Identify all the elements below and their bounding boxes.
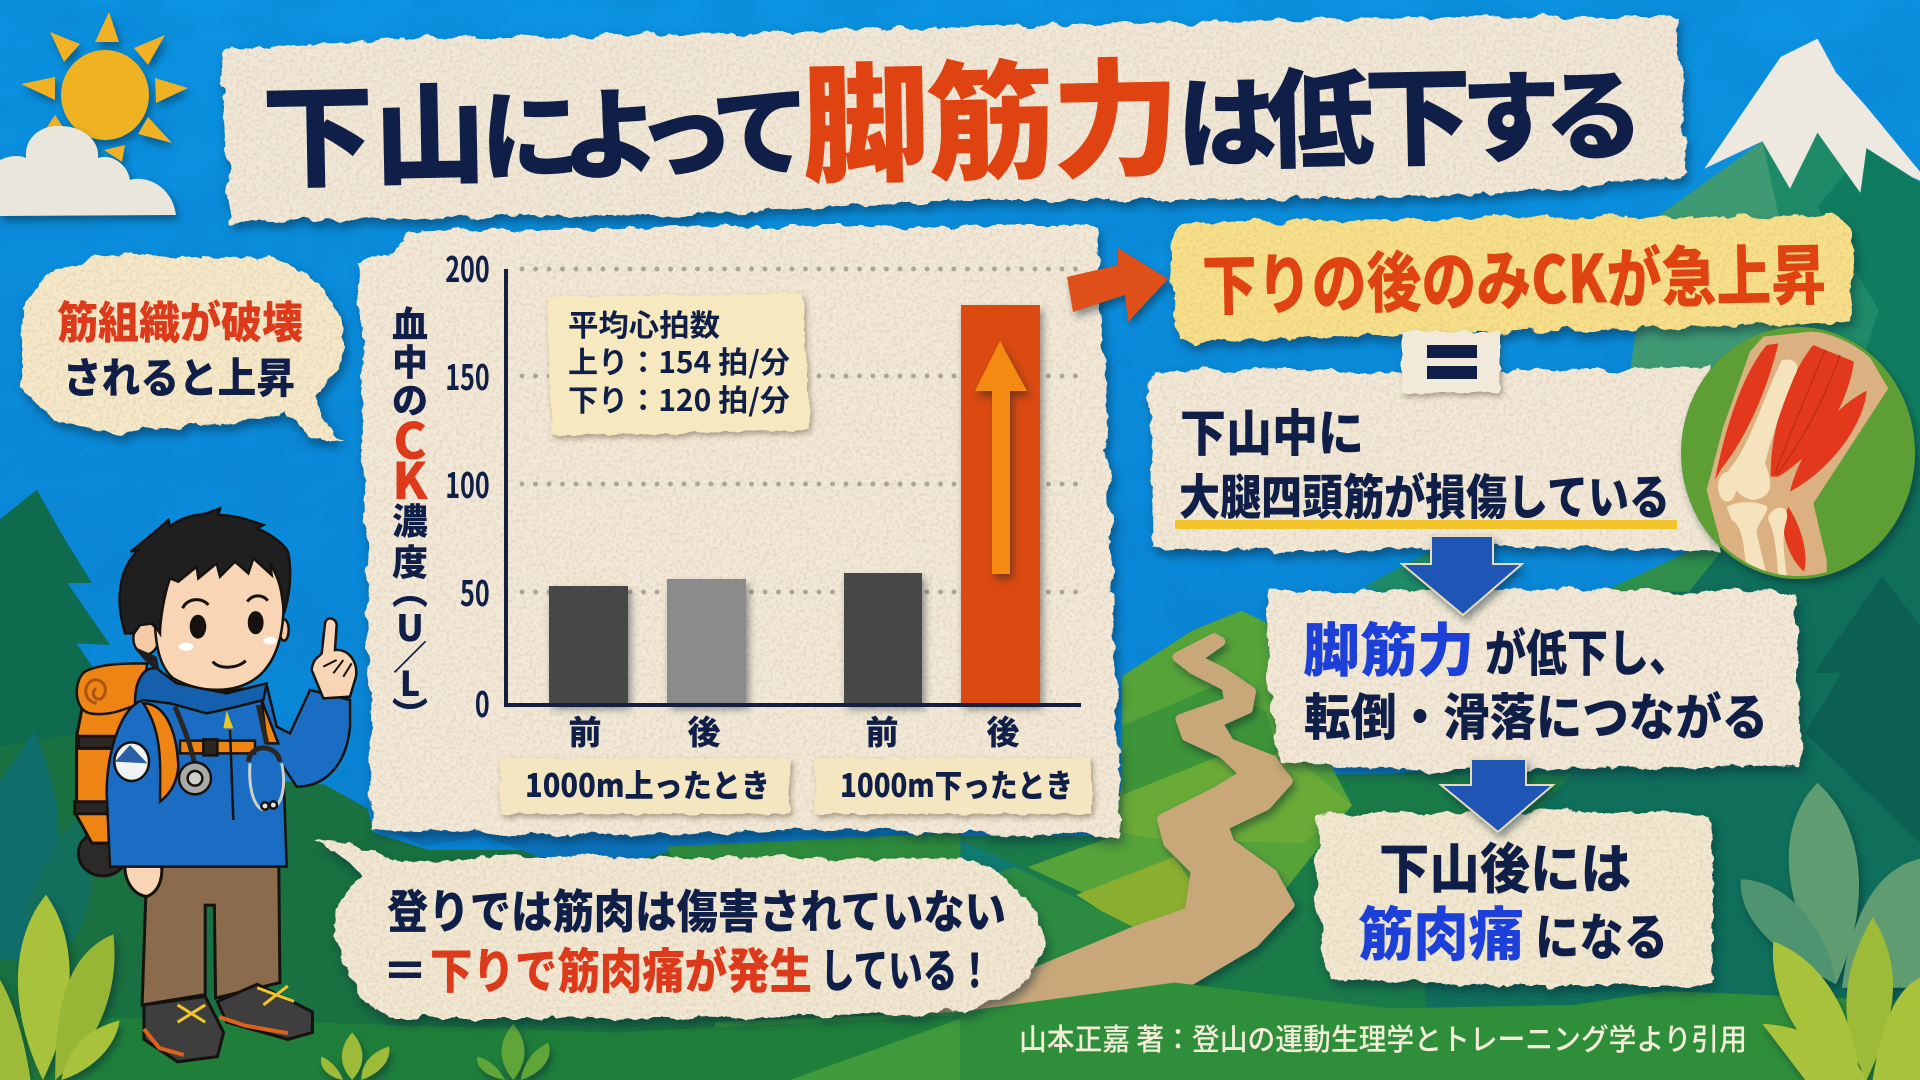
arrow: down 2 xyxy=(1441,759,1553,832)
source citation: 山本正嘉 著：登山の運動生理学とトレーニング学より引用 xyxy=(1019,1015,1747,1059)
chart gridlines xyxy=(522,269,1082,592)
plants: lime leaves bottom left xyxy=(0,895,119,1080)
bar: after ascent xyxy=(667,579,746,704)
chart y axis title: 中 xyxy=(392,334,428,386)
landscape: left forest and blue gap xyxy=(0,490,960,1080)
note: average heart rate: 下り：120 拍/分 xyxy=(568,376,790,420)
chart y axis title: ︶ xyxy=(392,687,428,739)
bar labels xyxy=(568,706,1020,754)
chart y axis title: 濃 xyxy=(392,493,428,545)
panel: muscle soreness after descent: 筋肉痛 xyxy=(1358,888,1524,972)
speech bubble: CK rises when muscle tissue is destroyed: 筋組織が破壊 xyxy=(57,287,303,351)
chart y axis title: K xyxy=(392,442,428,514)
chart axes xyxy=(506,269,1081,705)
character: lower body xyxy=(78,831,312,1062)
speech bubble: damage comes from the descent xyxy=(312,840,1043,1018)
mountain path xyxy=(923,638,1290,1022)
panel: leg strength falls: 転倒・滑落につながる xyxy=(1304,678,1768,750)
chart y axis labels: 100 xyxy=(445,458,490,508)
panel: muscle damage during descent: 下山中に xyxy=(1180,394,1364,466)
panel: leg strength falls: が低下し、 xyxy=(1485,614,1690,686)
bar labels: 前 xyxy=(568,706,602,754)
title text xyxy=(260,8,1645,219)
plants: small sprouts at the bottom xyxy=(321,1024,550,1080)
panel: muscle soreness after descent xyxy=(1316,810,1714,985)
panel: muscle soreness after descent: 下山後には xyxy=(1379,825,1631,904)
speech bubble: CK rises when muscle tissue is destroyed xyxy=(21,254,343,440)
speech bubble: damage comes from the descent: ＝ xyxy=(382,936,428,1002)
chart y axis labels: 0 xyxy=(475,677,490,727)
panel: muscle damage during descent xyxy=(1150,368,1718,552)
chart panel xyxy=(358,226,1120,836)
bar: after descent xyxy=(961,305,1040,704)
bar labels: 前 xyxy=(866,706,898,754)
chart y axis title: の xyxy=(392,372,428,424)
arrow: down 1 xyxy=(1402,536,1522,615)
chart y axis labels xyxy=(445,242,490,727)
bar labels: 後 xyxy=(688,706,720,754)
panel: leg strength falls xyxy=(1268,590,1802,772)
panel: muscle soreness after descent: になる xyxy=(1535,898,1668,970)
chart y axis title: U xyxy=(396,600,424,652)
chart y axis title: C xyxy=(393,402,427,474)
note: average heart rate: 平均心拍数 xyxy=(568,301,720,345)
sun xyxy=(21,12,188,162)
note: average heart rate: 上り：154 拍/分 xyxy=(568,338,790,382)
plants: teal leaves on the left xyxy=(0,731,92,960)
mountain with snowy peak xyxy=(1585,39,1920,540)
title text: は xyxy=(1175,42,1278,189)
arrow: rising CK xyxy=(975,341,1027,574)
chart y axis labels: 200 xyxy=(445,242,490,292)
chart y axis title: ︵ xyxy=(392,563,428,615)
title text: によって xyxy=(479,51,812,202)
group label: 1000m up: 1000m上ったとき xyxy=(525,761,770,807)
speech bubble: damage comes from the descent: 下りで筋肉痛が発生 xyxy=(430,932,812,1002)
plants: right side leaves xyxy=(1741,783,1920,1080)
group label: 1000m down: 1000m下ったとき xyxy=(840,761,1073,807)
title text: する xyxy=(1459,35,1645,183)
panel: muscle damage during descent: 大腿四頭筋が損傷している xyxy=(1179,458,1670,528)
equals sign card xyxy=(1402,331,1500,393)
title text: 下山 xyxy=(260,45,487,211)
character: hiker doctor pointing up xyxy=(75,508,356,1062)
chart y axis title xyxy=(392,296,428,739)
chart y axis title: ／ xyxy=(393,631,427,680)
arrow: from chart to conclusion xyxy=(1067,248,1168,322)
bar: before ascent xyxy=(549,586,628,704)
underline xyxy=(1175,520,1677,529)
character: upper body and head xyxy=(77,508,356,867)
title panel xyxy=(222,8,1688,222)
title text: 脚筋力 xyxy=(800,17,1181,209)
chart y axis labels: 50 xyxy=(460,566,490,616)
speech bubble: damage comes from the descent: している！ xyxy=(820,935,992,1001)
landscape: foreground ground xyxy=(0,983,1920,1080)
panel: leg strength falls: 脚筋力 xyxy=(1303,604,1474,688)
chart y axis labels: 150 xyxy=(445,350,490,400)
knee anatomy illustration xyxy=(1681,327,1915,583)
chart y axis title: 度 xyxy=(392,534,428,586)
chart y axis title: 血 xyxy=(392,296,428,348)
speech bubble: CK rises when muscle tissue is destroyed: されると上昇 xyxy=(63,345,295,406)
speech bubble: damage comes from the descent: 登りでは筋肉は傷害されていない xyxy=(387,876,1006,942)
character: backpack body xyxy=(75,692,147,843)
note: average heart rate xyxy=(547,293,810,436)
bar: before descent xyxy=(844,573,922,704)
cloud xyxy=(0,126,176,216)
bar labels: 後 xyxy=(986,706,1020,754)
landscape: central hills xyxy=(960,611,1352,1001)
landscape: green hills on the right xyxy=(899,454,1920,1080)
chart y axis title: L xyxy=(400,657,420,706)
title text: 低下 xyxy=(1264,31,1473,191)
